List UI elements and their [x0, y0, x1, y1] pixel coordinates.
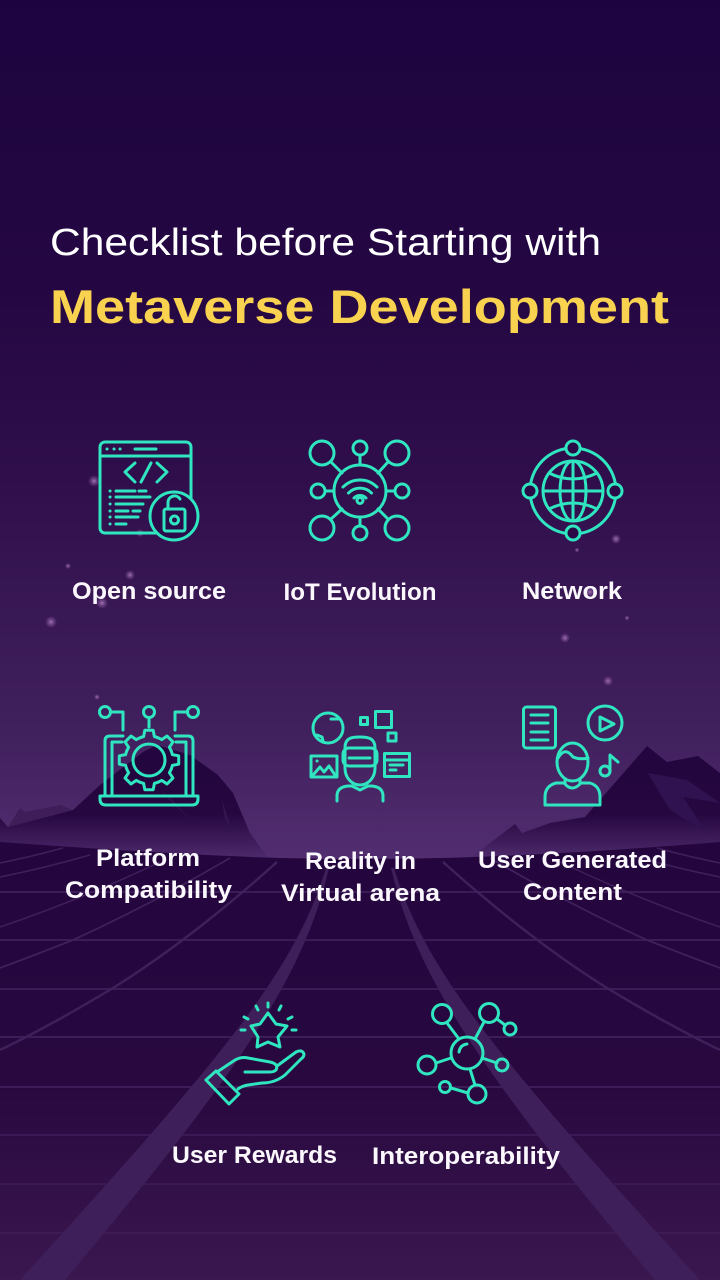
- item: reality in virtual arena: [281, 712, 441, 907]
- label: iot evolution: IoT Evolution: [284, 579, 436, 606]
- label: platform compatibility: Compatibility: [65, 877, 233, 904]
- icon: code window with open lock: [100, 442, 198, 540]
- icon: laptop with gear: [100, 706, 198, 805]
- icon: person with document, video and music: [524, 706, 622, 805]
- label: user rewards: User Rewards: [172, 1142, 337, 1169]
- background sky: [0, 0, 720, 870]
- label: reality in virtual arena: Virtual arena: [281, 880, 441, 907]
- icon: globe with orbit: [523, 441, 622, 540]
- item: interoperability: [372, 1004, 561, 1170]
- label: network: Network: [522, 578, 623, 605]
- icon: person with vr headset: [311, 712, 410, 801]
- label: reality in virtual arena: [281, 848, 441, 907]
- mountains right: [470, 746, 720, 858]
- label: platform compatibility: Platform: [96, 845, 200, 872]
- icon: wifi hub network: [310, 441, 409, 540]
- title line one: Checklist before Starting with: [50, 222, 601, 264]
- item: open source: [72, 442, 226, 605]
- label: open source: Open source: [72, 578, 226, 605]
- label: user generated content: [478, 847, 667, 906]
- item: iot evolution: [284, 441, 436, 606]
- icon: molecule network: [418, 1004, 516, 1103]
- label: user generated content: User Generated: [478, 847, 667, 874]
- label: interoperability: Interoperability: [372, 1143, 561, 1170]
- item: user rewards: [172, 1003, 337, 1169]
- ground plane with perspective grid: [0, 842, 720, 1280]
- item: network: [522, 441, 623, 605]
- icon: hand holding star: [206, 1003, 304, 1104]
- label: user generated content: Content: [523, 879, 622, 906]
- mountains left: [0, 745, 268, 858]
- background stars: [45, 475, 630, 700]
- item: user generated content: [478, 706, 667, 906]
- item: platform compatibility: [65, 706, 233, 904]
- label: platform compatibility: [65, 845, 233, 904]
- label: reality in virtual arena: Reality in: [305, 848, 416, 875]
- title line two: Metaverse Development: [50, 280, 669, 333]
